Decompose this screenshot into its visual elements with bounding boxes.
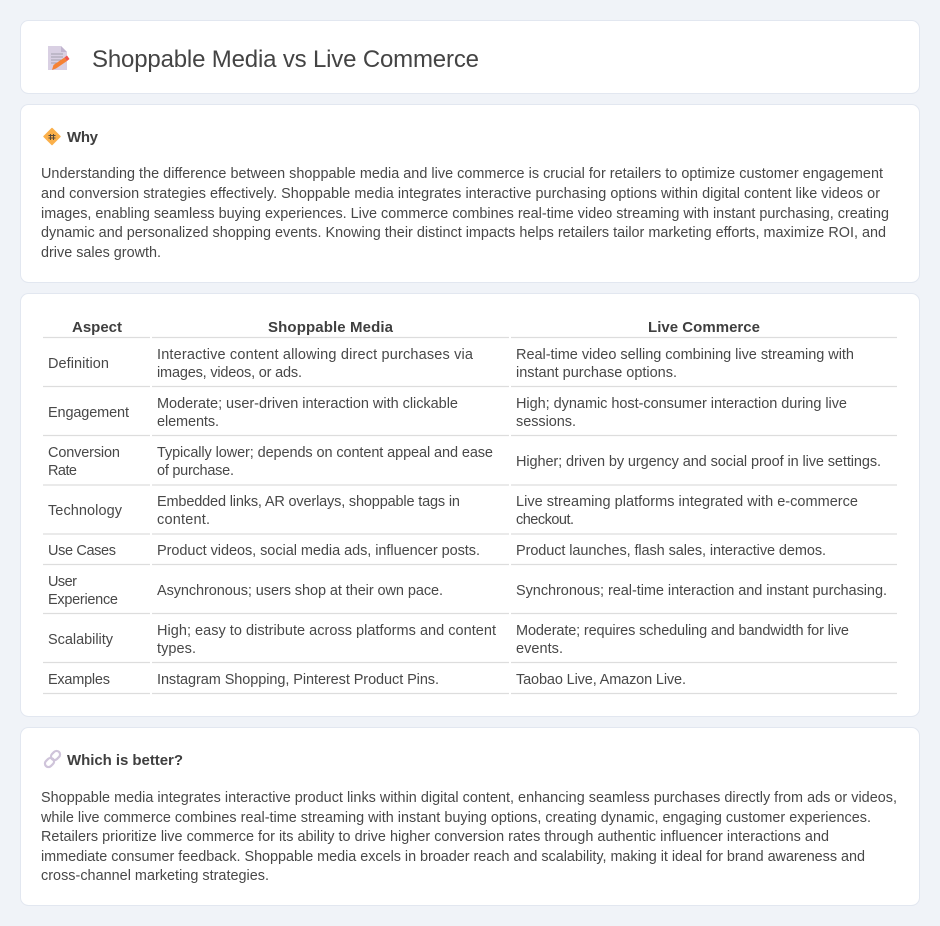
- row: definition: Real-time video selling combining live streaming with: [516, 347, 854, 363]
- row: definition: images, videos, or ads.: [157, 365, 302, 381]
- table header: [72, 319, 760, 336]
- panel: why: [20, 104, 920, 282]
- icon: memo and pencil: [48, 46, 70, 70]
- row: examples: Examples: [48, 672, 110, 688]
- row: examples: Taobao Live, Amazon Live.: [516, 672, 686, 688]
- row: examples: [48, 672, 686, 688]
- row: scalability: Moderate; requires scheduling and bandwidth for live: [516, 623, 849, 639]
- why paragraph: and conversion strategies effectively. Shoppable media integrates interactive purchasing options within digital content like videos or: [41, 186, 880, 202]
- row: scalability: Scalability: [48, 632, 114, 648]
- row: engagement: Engagement: [48, 405, 129, 421]
- panel: title: [20, 20, 920, 94]
- row: user experience: Experience: [48, 592, 118, 608]
- row: engagement: sessions.: [516, 414, 576, 430]
- table header: Shoppable Media: [268, 319, 394, 336]
- row: use cases: Product launches, flash sales, interactive demos.: [516, 543, 826, 559]
- row: scalability: High; easy to distribute across platforms and content: [157, 623, 496, 639]
- row: scalability: types.: [157, 641, 196, 657]
- row: technology: Live streaming platforms integrated with e-commerce: [516, 494, 858, 510]
- row: use cases: [48, 543, 826, 559]
- row: user experience: [48, 574, 887, 608]
- panel: comparison table: [20, 294, 920, 716]
- why paragraph: drive sales growth.: [41, 245, 161, 261]
- row: technology: Technology: [48, 503, 123, 519]
- why paragraph: [41, 166, 889, 261]
- icon: link: [43, 749, 62, 769]
- icon: warning diamond: [44, 128, 60, 144]
- row: technology: Embedded links, AR overlays, shoppable tags in: [157, 494, 460, 510]
- row: technology: checkout.: [516, 512, 574, 528]
- why paragraph: images, enabling seamless buying experiences. Live commerce combines real-time video streaming with instant purchasing, creating: [41, 206, 889, 222]
- row: scalability: events.: [516, 641, 563, 657]
- which is better paragraph: while live commerce combines real-time streaming with instant buying options, creating dynamic, engaging customer experiences.: [40, 810, 871, 826]
- table header: Live Commerce: [648, 319, 760, 336]
- row: engagement: High; dynamic host-consumer interaction during live: [516, 396, 847, 412]
- row: user experience: User: [48, 574, 77, 590]
- row: definition: Interactive content allowing direct purchases via: [157, 347, 474, 363]
- row: examples: Instagram Shopping, Pinterest Product Pins.: [157, 672, 439, 688]
- row: use cases: Use Cases: [48, 543, 116, 559]
- row: conversion rate: of purchase.: [157, 463, 234, 479]
- row: definition: [48, 347, 854, 381]
- heading: which is better: Which is better?: [67, 752, 183, 769]
- row: definition: instant purchase options.: [516, 365, 677, 381]
- heading: why: Why: [67, 129, 99, 146]
- row: conversion rate: Typically lower; depends on content appeal and ease: [157, 445, 493, 461]
- row: technology: content.: [157, 512, 210, 528]
- which is better paragraph: Shoppable media integrates interactive product links within digital content, enhancing seamless purchases directly from ads or videos,: [41, 790, 897, 806]
- row: scalability: [48, 623, 849, 657]
- row: engagement: Moderate; user-driven interaction with clickable: [157, 396, 458, 412]
- row: definition: Definition: [48, 356, 109, 372]
- row: use cases: Product videos, social media ads, influencer posts.: [157, 543, 480, 559]
- which is better paragraph: cross-channel marketing strategies.: [41, 868, 269, 884]
- row: conversion rate: Conversion: [48, 445, 120, 461]
- why paragraph: Understanding the difference between shoppable media and live commerce is crucial for retailers to optimize customer engagement: [41, 166, 883, 182]
- title text: Shoppable Media vs Live Commerce: [92, 46, 479, 73]
- row: engagement: [48, 396, 847, 430]
- row: technology: [48, 494, 858, 528]
- row: user experience: Synchronous; real-time interaction and instant purchasing.: [516, 583, 887, 599]
- table header: Aspect: [72, 319, 122, 336]
- which is better paragraph: Retailers prioritize live commerce for its ability to drive higher conversion rates through authentic influencer interactions and: [41, 829, 829, 845]
- why paragraph: dynamic and personalized shopping events. Knowing their distinct impacts helps retailers tailor marketing efforts, maximize ROI, and: [41, 225, 886, 241]
- panel: which is better: [20, 728, 920, 906]
- row: conversion rate: [48, 445, 881, 479]
- row: engagement: elements.: [157, 414, 219, 430]
- which is better paragraph: immediate consumer feedback. Shoppable media excels in broader reach and scalability, making it ideal for brand awareness and: [41, 849, 865, 865]
- row: conversion rate: Rate: [48, 463, 77, 479]
- row: conversion rate: Higher; driven by urgency and social proof in live settings.: [516, 454, 881, 470]
- which is better paragraph: [40, 790, 897, 884]
- row: user experience: Asynchronous; users shop at their own pace.: [157, 583, 443, 599]
